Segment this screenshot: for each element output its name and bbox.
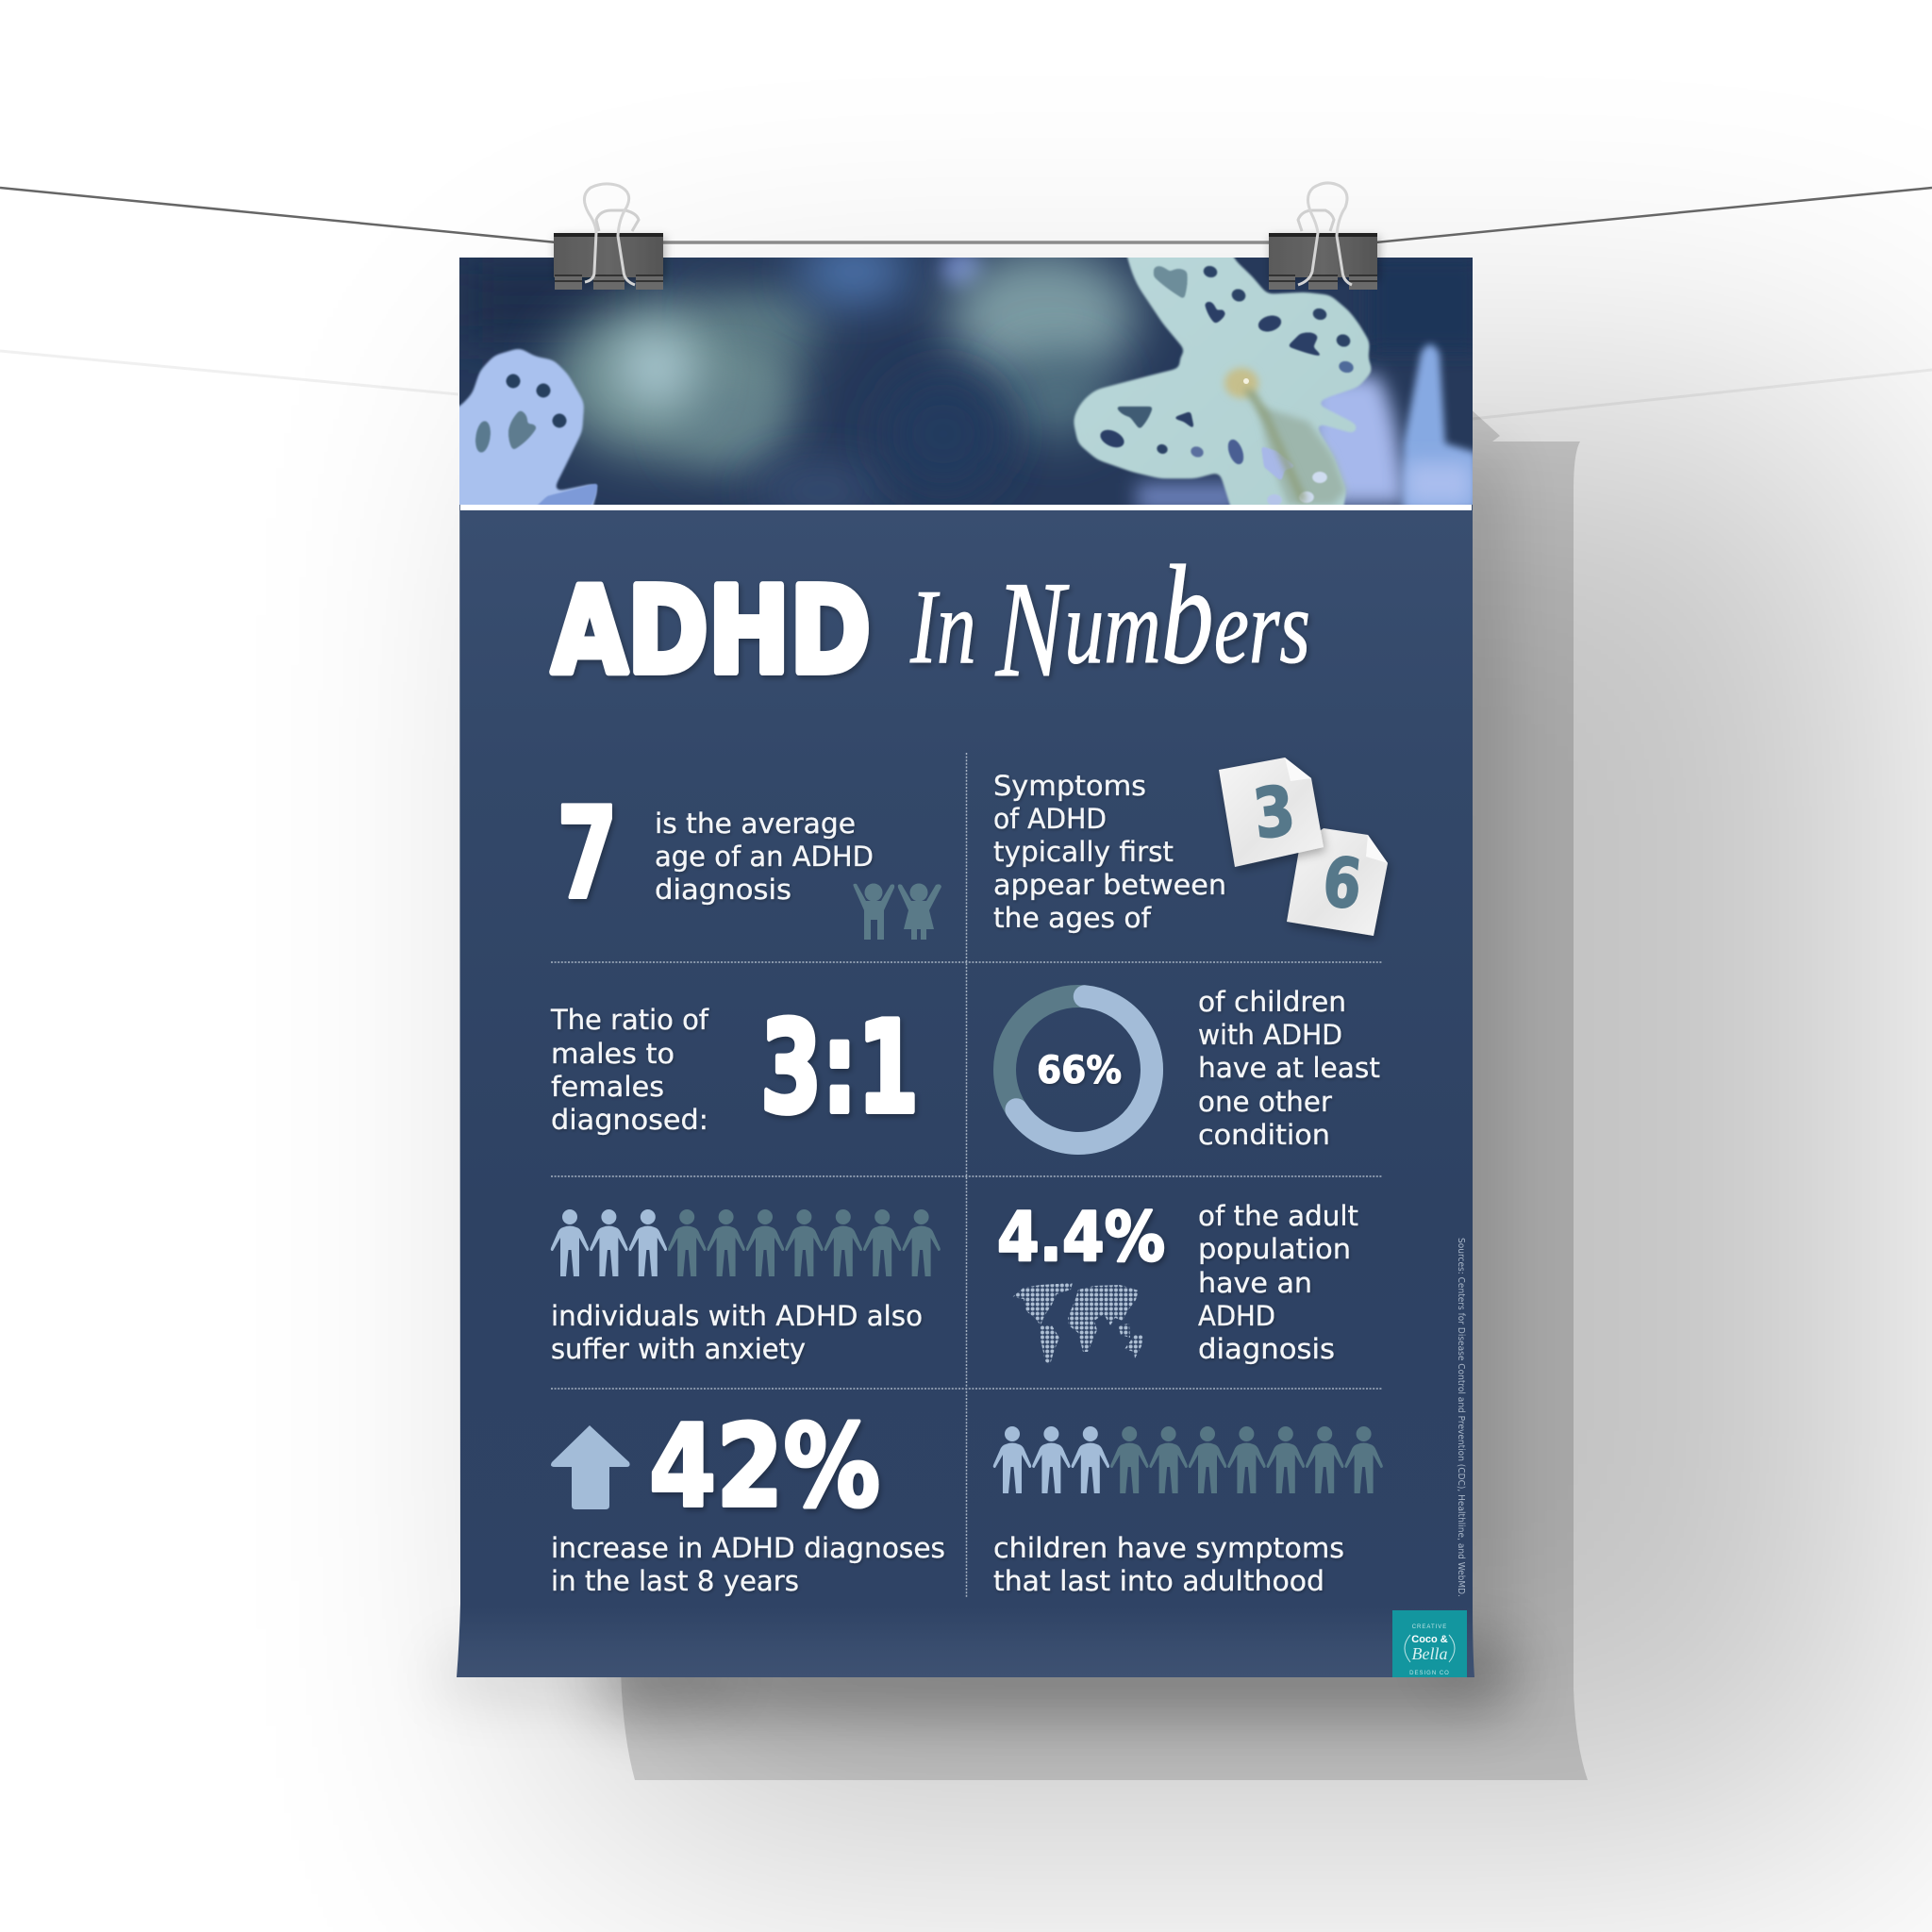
text: increase in diagnoses: in the last 8 years	[551, 1565, 799, 1597]
stat: symptoms into adulthood	[993, 1426, 1383, 1597]
poster	[443, 236, 1481, 1677]
icon: paper note 6	[1287, 828, 1388, 936]
donut value: 66%	[1037, 1049, 1122, 1092]
title script: In Numbers: N	[994, 553, 1070, 706]
text: symptoms first appear: typically first	[993, 836, 1174, 868]
wire and its shadow	[0, 188, 1932, 419]
text: individuals with anxiety: individuals with ADHD also	[551, 1300, 923, 1332]
pictogram: 3 of 10 children	[993, 1426, 1383, 1493]
text: symptoms first appear	[993, 770, 1226, 934]
photo banner: paper butterflies	[459, 258, 1473, 505]
icon: two children	[853, 883, 941, 940]
stat: 4.4 percent adults	[997, 1197, 1358, 1365]
text: symptoms first appear: appear between	[993, 869, 1226, 901]
poster sheet	[457, 258, 1474, 1677]
text: symptoms first appear: the ages of	[993, 902, 1152, 934]
title script: In Numbers: um	[1064, 569, 1161, 686]
text: is the average age: diagnosis	[655, 874, 791, 906]
text: children with other condition: one other	[1198, 1086, 1332, 1118]
number 42%: 42%	[649, 1402, 880, 1533]
text: of the adult population: of the adult	[1198, 1200, 1358, 1232]
text: is the average age: age of an ADHD	[655, 841, 874, 873]
icon: dotted world map	[1012, 1283, 1143, 1365]
text: symptoms first appear: of ADHD	[993, 803, 1107, 835]
text: children with symptoms: children have symptoms	[993, 1532, 1344, 1564]
text: ratio of males to females: The ratio of	[550, 1004, 709, 1036]
pictogram: 3 of 10 people	[551, 1209, 941, 1276]
number 3:1: 3:1	[760, 994, 919, 1141]
text: children with symptoms: that last into adulthood	[993, 1565, 1324, 1597]
text: of the adult population: diagnosis	[1198, 1333, 1335, 1365]
stat: average age 7	[557, 780, 941, 940]
sources note: Sources: Centers for Disease Control and Prevention (CDC), Healthline, and WebMD.	[1456, 1238, 1466, 1597]
text: symptoms first appear: Symptoms	[993, 770, 1146, 802]
butterfly body	[1224, 368, 1307, 503]
text: of the adult population: population	[1198, 1233, 1351, 1265]
icon: paper note 3	[1219, 758, 1324, 867]
stat: ages 3 to 6	[993, 758, 1388, 936]
grid dividers	[551, 753, 1382, 1598]
stat: anxiety pictogram	[551, 1209, 941, 1365]
binder clip left	[554, 184, 663, 290]
butterfly left	[459, 347, 598, 505]
icon: paper note 6: 6	[1320, 841, 1365, 924]
white stripe	[460, 505, 1472, 510]
binder clip right	[1269, 183, 1377, 290]
number 7: 7	[557, 780, 618, 927]
text: is the average age	[655, 808, 874, 906]
butterfly right	[1073, 258, 1373, 505]
number 4.4%: 4.4%	[997, 1197, 1165, 1276]
icon: up arrow	[551, 1425, 630, 1509]
text: of the adult population	[1198, 1200, 1358, 1365]
title script: In Numbers: In	[910, 569, 998, 686]
title script: In Numbers: bers	[1161, 537, 1343, 693]
text: ratio of males to females: males to	[551, 1038, 675, 1070]
text: children with symptoms	[993, 1532, 1344, 1597]
text: children with other condition: have at least	[1198, 1052, 1380, 1084]
text: of the adult population: have an	[1198, 1267, 1312, 1299]
blurred bokeh	[459, 242, 1481, 511]
text: children with other condition	[1198, 986, 1380, 1151]
logo badge: Bella	[1411, 1644, 1447, 1663]
stat: 42 percent increase	[551, 1402, 945, 1597]
logo badge	[1392, 1610, 1467, 1677]
text: ratio of males to females: females	[551, 1071, 664, 1103]
text: ratio of males to females	[550, 1004, 709, 1136]
text: children with other condition: condition	[1198, 1119, 1330, 1151]
donut chart	[998, 990, 1158, 1150]
stat: 66 percent donut	[998, 986, 1380, 1151]
text: children with other condition: of children	[1198, 986, 1346, 1018]
text: of the adult population: ADHD	[1198, 1300, 1275, 1332]
title	[552, 537, 1310, 706]
text: individuals with anxiety	[551, 1300, 923, 1365]
text: children with other condition: with ADHD	[1198, 1019, 1342, 1051]
text: increase in diagnoses	[551, 1532, 945, 1597]
logo badge: Coco &	[1411, 1634, 1448, 1645]
icon: paper note 3: 3	[1249, 771, 1299, 854]
cast shadow of poster	[443, 406, 1588, 1780]
text: increase in diagnoses: increase in ADHD diagnoses	[551, 1532, 945, 1564]
text: individuals with anxiety: suffer with anxiety	[551, 1333, 806, 1365]
logo badge: CREATIVE	[1412, 1624, 1447, 1630]
text: ratio of males to females: diagnosed:	[551, 1104, 708, 1136]
logo badge: DESIGN CO	[1409, 1671, 1450, 1676]
title word: ADHD: ADHD	[552, 561, 871, 700]
text: is the average age: is the average	[655, 808, 856, 840]
stat: ratio 3:1	[550, 994, 919, 1141]
